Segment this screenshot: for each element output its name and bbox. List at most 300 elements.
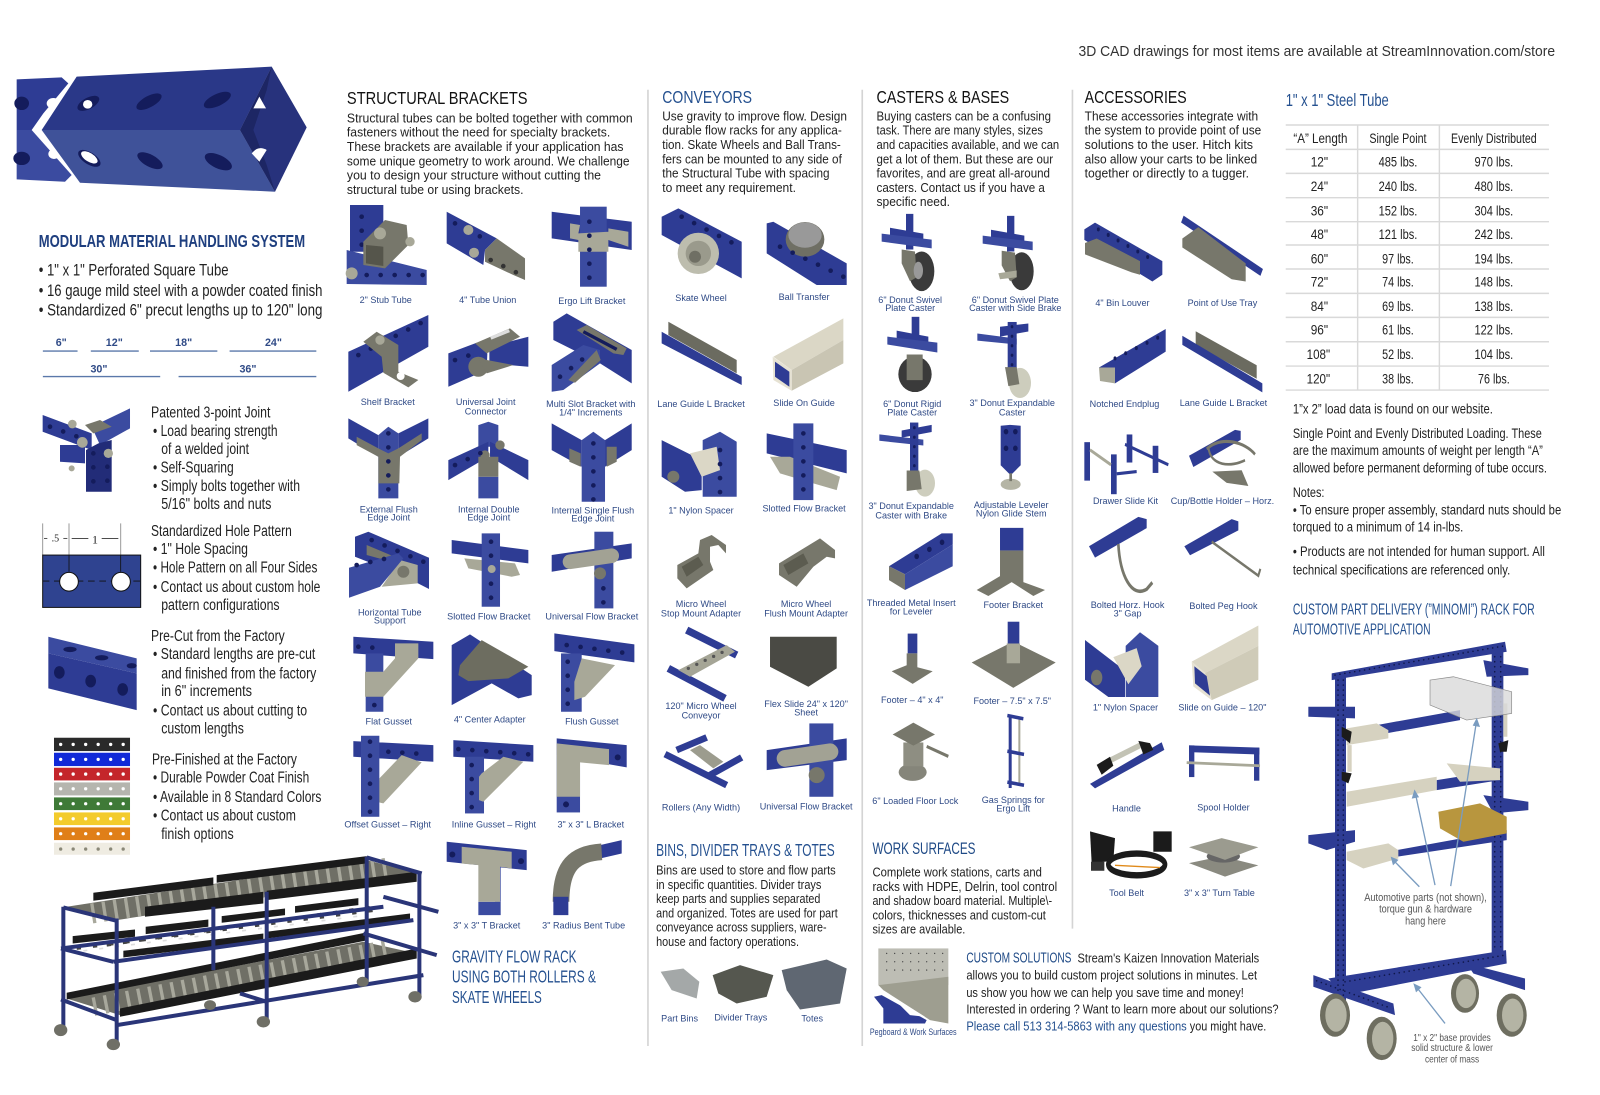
load table: 108" [1307,347,1330,363]
item: internal double edge joint: Internal Double [458,504,520,514]
item: T bracket [447,842,527,931]
item: adjustable leveler: Adjustable Leveler [974,500,1049,510]
text: pre-cut benefits: and finished from the factory [161,666,317,683]
item: 2 inch stub tube: 2" Stub Tube [360,295,412,305]
text block: some unique geometry to work around. We challenge [347,153,630,168]
item: flex slide: Flex Slide 24" x 120" [764,699,848,709]
item: universal flow bracket: Universal Flow Bracket [760,801,853,811]
item: ergo lift bracket [552,207,632,306]
item: donut swivel side brake caster: 6" Donut Swivel Plate [972,295,1059,305]
item: lane guide l bracket: Lane Guide L Bracket [1180,398,1268,408]
item: horizontal tube support: Support [374,616,406,626]
image: pegboard and work surfaces: Pegboard & Work Surfaces [870,1027,957,1037]
item: ball transfer: Ball Transfer [779,292,830,302]
text: joint benefits: • Simply bolts together with [153,478,300,495]
item: slide on guide [773,318,843,408]
text block: custom solutions: CUSTOM SOLUTIONS [966,950,1072,966]
item: flat gusset [353,637,433,727]
bullet list: • Standardized 6" precut lengths up to 120" long [39,301,322,319]
item: rollers: Rollers (Any Width) [662,802,740,812]
icon: part bins [661,968,699,1024]
item: flush gusset [554,633,634,727]
illustration: gravity flow rack [54,856,438,1050]
text block: Structural tubes can be bolted together with common [347,110,633,125]
panel: modular system intro [39,231,322,377]
heading: 1" x 1" Steel Tube [1286,90,1389,110]
text: hole pattern benefits: • Hole Pattern on all Four Sides [153,560,318,577]
text block [347,110,633,197]
text block: the system to provide point of use [1085,123,1261,138]
panel: accessories [1084,87,1274,898]
panel: bins, divider trays and totes [656,840,847,1024]
text block: fers can be mounted to any side of [662,151,842,166]
load table: 242 lbs. [1474,227,1513,243]
item: slotted flow bracket: Slotted Flow Bracket [447,611,531,621]
item: internal single flush edge joint: Internal Single Flush [551,505,634,515]
text block: sizes are available. [872,922,965,937]
item: handle: Handle [1112,803,1141,813]
text block: and shadow board material. Multiple\- [872,893,1052,908]
item: footer 7.5 x 7.5 [972,622,1056,706]
load table: 96" [1311,323,1328,339]
icon: pre-cut tube [48,637,137,710]
item: donut expandable caster: Caster [999,407,1026,417]
text block: load notes: Notes: [1293,485,1324,501]
item: 4 inch tube union: 4" Tube Union [459,295,516,305]
panel: gravity flow rack caption: USING BOTH ROLLERS & [452,967,596,987]
text: hole pattern benefits: Standardized Hole Pattern [151,523,292,540]
item: internal single flush edge joint: Edge Joint [571,513,615,523]
item: gas springs: Ergo Lift [996,803,1031,813]
item: footer 7.5 x 7.5: Footer – 7.5" x 7.5" [973,696,1051,706]
text block: These brackets are available if your application has [347,139,624,154]
item: donut swivel side brake caster [969,216,1061,313]
item: turn table [1184,838,1258,898]
heading: BINS, DIVIDER TRAYS & TOTES [656,840,835,860]
text block: also allow your carts to be linked [1085,151,1257,166]
panel: gravity flow rack caption [452,946,596,1007]
text block [656,863,838,949]
item: 2 inch stub tube [346,205,427,305]
item: notched endplug [1090,329,1166,409]
item: flush gusset: Flush Gusset [565,717,619,727]
item: bin louver [1084,223,1162,308]
callout: automotive parts: torque gun & hardware [1379,903,1472,915]
item: tool belt [1090,831,1172,898]
item: gas springs: Gas Springs for [982,795,1045,805]
text block: together or directly to a tugger. [1085,166,1249,181]
panel: steel tube load table [1286,90,1561,579]
tube length scale [43,337,316,377]
callout: automotive parts: hang here [1405,916,1446,928]
item: footer bracket [977,528,1045,610]
load table: 61 lbs. [1382,323,1414,339]
text block: custom solutions: allows you to build custom project solutions in minutes. Let [966,968,1257,983]
load table: 304 lbs. [1474,203,1513,219]
item: external flush edge joint: Edge Joint [367,512,411,522]
load table: Single Point [1369,131,1427,147]
text: joint benefits: 5/16" bolts and nuts [161,496,272,513]
item: nylon spacer: 1" Nylon Spacer [668,505,734,515]
panel: patented 3-point joint [43,404,300,513]
load table: 74 lbs. [1382,275,1414,291]
illustration: rack [1308,642,1528,1060]
text: pre-cut benefits: custom lengths [161,721,244,738]
text: pre-cut benefits: in 6" increments [161,683,252,700]
panel: structural brackets [344,88,639,931]
load table: 72" [1311,275,1328,291]
item: shelf bracket: Shelf Bracket [361,397,415,407]
icon: divider trays: Divider Trays [714,1013,768,1023]
item: threaded metal insert: for Leveler [890,606,933,616]
text block: keep parts and supplies separated [656,891,820,906]
text block [877,108,1059,209]
item: lane guide l bracket: Lane Guide L Bracket [657,399,745,409]
item: slide on guide: Slide on Guide – 120" [1178,702,1266,712]
item: threaded metal insert [867,533,956,616]
diagram: hole spacing: .5 [52,534,59,545]
text block: Bins are used to store and flow parts [656,863,836,878]
text: hole pattern benefits: pattern configurations [161,597,280,614]
item: donut expandable caster [969,322,1055,417]
panel: minomi rack [1293,601,1535,1065]
item: donut expandable caster: 3" Donut Expandable [969,398,1055,408]
item: adjustable leveler [974,425,1049,518]
text block: tion. Skate Wheels and Ball Trans- [662,137,841,152]
item: slotted flow bracket [447,533,531,621]
load table: 48" [1311,227,1328,243]
load table: 97 lbs. [1382,251,1414,267]
bullet list: • 16 gauge mild steel with a powder coated finish [39,282,322,300]
load table: 485 lbs. [1379,154,1417,170]
panel: gravity flow rack caption: SKATE WHEELS [452,987,542,1007]
item: horizontal tube support [349,532,429,626]
load table: Evenly Distributed [1451,131,1537,147]
load table: 52 lbs. [1382,347,1414,363]
text block: Complete work stations, carts and [872,865,1042,880]
text block: These accessories integrate with [1085,108,1258,123]
text block: load notes: technical specifications are referenced only. [1293,563,1510,579]
item: loaded floor lock [872,723,959,806]
load table: 970 lbs. [1474,154,1513,170]
icon: divider trays [713,965,773,1023]
load table: 36" [1311,203,1328,219]
panel: gravity flow rack caption: GRAVITY FLOW RACK [452,946,577,966]
item: donut rigid plate caster [883,317,941,417]
item: bolted peg hook: Bolted Peg Hook [1189,601,1258,611]
text: pre-cut benefits: • Standard lengths are pre-cut [153,646,316,663]
item: universal flow bracket [545,532,639,621]
item: T bracket: 3" x 3" T Bracket [453,921,521,931]
text block: favorites, and are great all-around [877,166,1050,181]
item: skate wheel [662,208,742,303]
text block: load notes: torqued to a minimum of 14 in-lbs. [1293,520,1463,536]
load table: 480 lbs. [1474,179,1513,195]
item: threaded metal insert: Threaded Metal Insert [867,598,956,608]
load table: 38 lbs. [1382,372,1414,388]
heading: WORK SURFACES [872,840,976,858]
item: donut expandable caster with brake: Caster with Brake [875,510,947,520]
text block: get a lot of them. But these are our [877,151,1054,166]
heading: ACCESSORIES [1085,87,1187,107]
item: flex slide [764,637,848,717]
tube length scale: 36" [239,363,256,375]
item: donut rigid plate caster: 6" Donut Rigid [883,399,941,409]
item: micro wheel conveyor: Conveyor [682,710,720,720]
load table: 84" [1311,299,1328,315]
title: MODULAR MATERIAL HANDLING SYSTEM [39,231,305,251]
icon: totes: Totes [801,1014,824,1024]
panel: conveyors [657,87,853,812]
text block: load notes: • Products are not intended for human support. All [1293,544,1545,560]
item: multi slot bracket [546,313,635,417]
item: flat gusset: Flat Gusset [366,717,412,727]
item: gas springs [982,715,1045,813]
text block [662,108,847,195]
callout: base [1411,1033,1494,1065]
text block: to meet any requirement. [662,180,796,195]
item: external flush edge joint: External Flush [360,504,418,514]
bullet list [39,262,322,319]
item: inline gusset: Inline Gusset – Right [452,820,536,830]
callout: automotive parts: Automotive parts (not shown), [1364,892,1487,904]
panel: pre-finished colors [54,738,322,855]
hero image: perforated square tube [13,67,307,192]
load table: 240 lbs. [1379,179,1417,195]
callout: base: solid structure & lower [1411,1043,1494,1054]
text block: in specific quantities. Divider trays [656,877,822,892]
text block: and organized. Totes are used for part [656,905,838,920]
item: donut expandable caster with brake [868,423,954,520]
item: lane guide l bracket [657,322,745,409]
item: donut rigid plate caster: Plate Caster [887,407,937,417]
text block: the Structural Tube with spacing [662,166,830,181]
diagram: hole spacing: 1 [92,532,98,546]
item: external flush edge joint [348,418,428,522]
text block: custom solutions: us show you how we can help you save time and money! [966,985,1244,1000]
panel: custom solutions [870,948,1279,1037]
text block [1085,108,1261,181]
diagram: hole spacing [43,523,141,607]
text block: Use gravity to improve flow. Design [662,108,847,123]
text block: task. There are many styles, sizes [877,123,1043,138]
load table: 122 lbs. [1474,323,1513,339]
text block: custom solutions: Interested in ordering ? Want to learn more about our solutions? [966,1001,1279,1016]
item: donut swivel plate caster: 6" Donut Swivel [878,295,942,305]
item: offset gusset: Offset Gusset – Right [344,820,432,830]
item: radius bent tube: 3" Radius Bent Tube [542,921,625,931]
item: internal double edge joint [448,422,528,522]
text: finish benefits: • Contact us about custom [153,807,296,824]
text block: custom solutions: Please call 513 314-5863 with any questions [966,1019,1187,1034]
text block: structural tube or using brackets. [347,182,523,197]
text: pre-cut benefits: • Contact us about cutting to [153,702,307,719]
load table: 76 lbs. [1478,372,1510,388]
item: drawer slide kit: Drawer Slide Kit [1093,496,1159,506]
item: 4 inch tube union [447,212,525,305]
item: flex slide: Sheet [794,707,818,717]
load table: 194 lbs. [1474,251,1513,267]
item: micro wheel stop mount adapter: Micro Wheel [676,599,726,609]
item: cup holder: Cup/Bottle Holder – Horz. [1171,496,1274,506]
item: slotted flow bracket: Slotted Flow Bracket [762,503,846,513]
item: slide on guide: Slide On Guide [773,398,835,408]
item: universal flow bracket: Universal Flow Bracket [545,611,639,621]
item: spool holder [1187,745,1260,812]
text: finish benefits: • Available in 8 Standard Colors [153,789,322,806]
column dividers [648,90,1072,1046]
item: inline gusset [452,740,536,830]
heading: STRUCTURAL BRACKETS [347,88,528,108]
text block: Buying casters can be a confusing [877,108,1051,123]
item: tool belt: Tool Belt [1109,888,1144,898]
load table: 24" [1311,179,1328,195]
item: ergo lift bracket: Ergo Lift Bracket [558,296,626,306]
item: donut swivel plate caster: Plate Caster [885,303,935,313]
item: footer 4 x 4 [881,634,943,705]
text block: load notes: 1”x 2” load data is found on our website. [1293,401,1493,417]
text block [872,865,1057,937]
item: loaded floor lock: 6" Loaded Floor Lock [872,796,959,806]
heading [1293,601,1535,639]
tube length scale: 18" [175,337,192,349]
text: finish benefits [152,751,322,843]
text: joint benefits [151,404,300,513]
item: rollers [662,737,742,812]
item: skate wheel: Skate Wheel [675,293,727,303]
load table [1286,125,1549,390]
item: L bracket [557,738,627,830]
text block: and capacities available, and we can [877,137,1059,152]
callout: base: 1" x 2" base provides [1413,1033,1491,1044]
text block: fasteners without the need for specialty brackets. [347,125,610,140]
heading: CONVEYORS [662,87,752,107]
icon: color swatches [54,738,130,855]
load table: 60" [1311,251,1328,267]
load table: “A” Length [1293,131,1347,147]
item: micro wheel flush mount adapter: Micro Wheel [781,599,831,609]
text: pre-cut benefits: Pre-Cut from the Factory [151,628,285,645]
callout: automotive parts [1364,892,1487,928]
text: joint benefits: • Self-Squaring [153,459,234,476]
item: donut swivel plate caster [878,214,942,313]
item: nylon spacer [662,432,737,515]
heading: AUTOMOTIVE APPLICATION [1293,622,1431,639]
text block: colors, thicknesses and custom-cut [872,907,1046,922]
item: center adapter [452,634,532,725]
item: micro wheel flush mount adapter [764,538,848,618]
item: notched endplug: Notched Endplug [1090,399,1159,409]
panel: work surfaces [872,840,1057,937]
item: donut swivel side brake caster: Caster with Side Brake [969,303,1061,313]
text block: custom solutions: you might have. [1190,1019,1266,1034]
panel: standardized hole pattern [43,523,320,614]
text block: house and factory operations. [656,934,799,949]
icon: totes [782,959,847,1024]
load table: 12" [1311,154,1328,170]
text: joint benefits: Patented 3-point Joint [151,404,271,421]
text: joint benefits: of a welded joint [161,441,250,458]
text block: conveyance across suppliers, ware- [656,920,827,935]
item: micro wheel flush mount adapter: Flush Mount Adapter [764,608,848,618]
item: spool holder: Spool Holder [1197,802,1250,812]
icon: joint [43,408,130,492]
item: universal flow bracket [760,723,853,811]
icon: part bins: Part Bins [661,1014,698,1024]
text block: solutions to the user. Hitch kits [1085,137,1253,152]
item: bolted horizontal hook: 3" Gap [1114,608,1142,618]
item: donut expandable caster with brake: 3" Donut Expandable [868,501,954,511]
load table: 121 lbs. [1379,227,1417,243]
load table: 152 lbs. [1379,203,1417,219]
item: bolted horizontal hook [1089,517,1165,618]
item: universal joint connector: Universal Joint [456,397,516,407]
text: hole pattern benefits: • 1" Hole Spacing [153,541,248,558]
item: bin louver: 4" Bin Louver [1095,298,1150,308]
heading: CASTERS & BASES [877,87,1009,107]
item: shelf bracket [348,315,428,407]
item: handle [1090,741,1164,813]
item: offset gusset [344,736,433,830]
text block: durable flow racks for any applica- [662,123,842,138]
tube length scale: 12" [106,337,123,349]
item: radius bent tube [542,840,625,931]
item: nylon spacer: 1" Nylon Spacer [1093,702,1158,712]
text: hole pattern benefits [151,523,320,614]
item: micro wheel conveyor [665,630,737,720]
item: cup holder [1171,430,1274,506]
item: adjustable leveler: Nylon Glide Stem [976,508,1047,518]
item: slotted flow bracket [762,423,847,513]
item: bolted peg hook [1184,519,1260,611]
panel: pre-cut from the factory [48,628,317,738]
item: micro wheel stop mount adapter: Stop Mount Adapter [661,608,741,618]
text: joint benefits: • Load bearing strength [153,423,278,440]
item: ball transfer [767,222,847,302]
item: multi slot bracket: 1/4" Increments [559,407,623,417]
load table: 148 lbs. [1474,275,1513,291]
load table: 138 lbs. [1474,299,1513,315]
item: center adapter: 4" Center Adapter [454,715,526,725]
text: finish benefits: • Durable Powder Coat Finish [153,770,309,787]
item: horizontal tube support: Horizontal Tube [358,607,422,617]
text block: you to design your structure without cutting the [347,168,601,183]
item: point of use tray: Point of Use Tray [1188,298,1258,308]
item: L bracket: 3" x 3" L Bracket [557,820,625,830]
item: slide on guide [1178,625,1266,712]
item: multi slot bracket: Multi Slot Bracket with [546,399,635,409]
item: footer bracket: Footer Bracket [983,600,1044,610]
text block: specific need. [877,194,950,209]
bullet list: • 1" x 1" Perforated Square Tube [39,262,229,280]
item: nylon spacer [1085,632,1158,712]
item: drawer slide kit [1084,434,1168,506]
text block: custom solutions [966,950,1279,1034]
item: micro wheel conveyor: 120" Micro Wheel [665,701,737,711]
load table: 69 lbs. [1382,299,1414,315]
item: internal single flush edge joint [551,423,634,523]
text: finish benefits: Pre-Finished at the Factory [152,751,297,768]
text: pre-cut benefits [151,628,317,738]
header note: 3D CAD drawings for most items are available at StreamInnovation.com/store [1079,44,1555,60]
text block: racks with HDPE, Delrin, tool control [872,879,1057,894]
item: internal double edge joint: Edge Joint [467,512,511,522]
tube length scale: 30" [90,363,107,375]
item: bolted horizontal hook: Bolted Horz. Hook [1091,600,1165,610]
load table: 120" [1307,372,1330,388]
text block: casters. Contact us if you have a [877,180,1045,195]
image: pegboard and work surfaces [870,948,957,1037]
